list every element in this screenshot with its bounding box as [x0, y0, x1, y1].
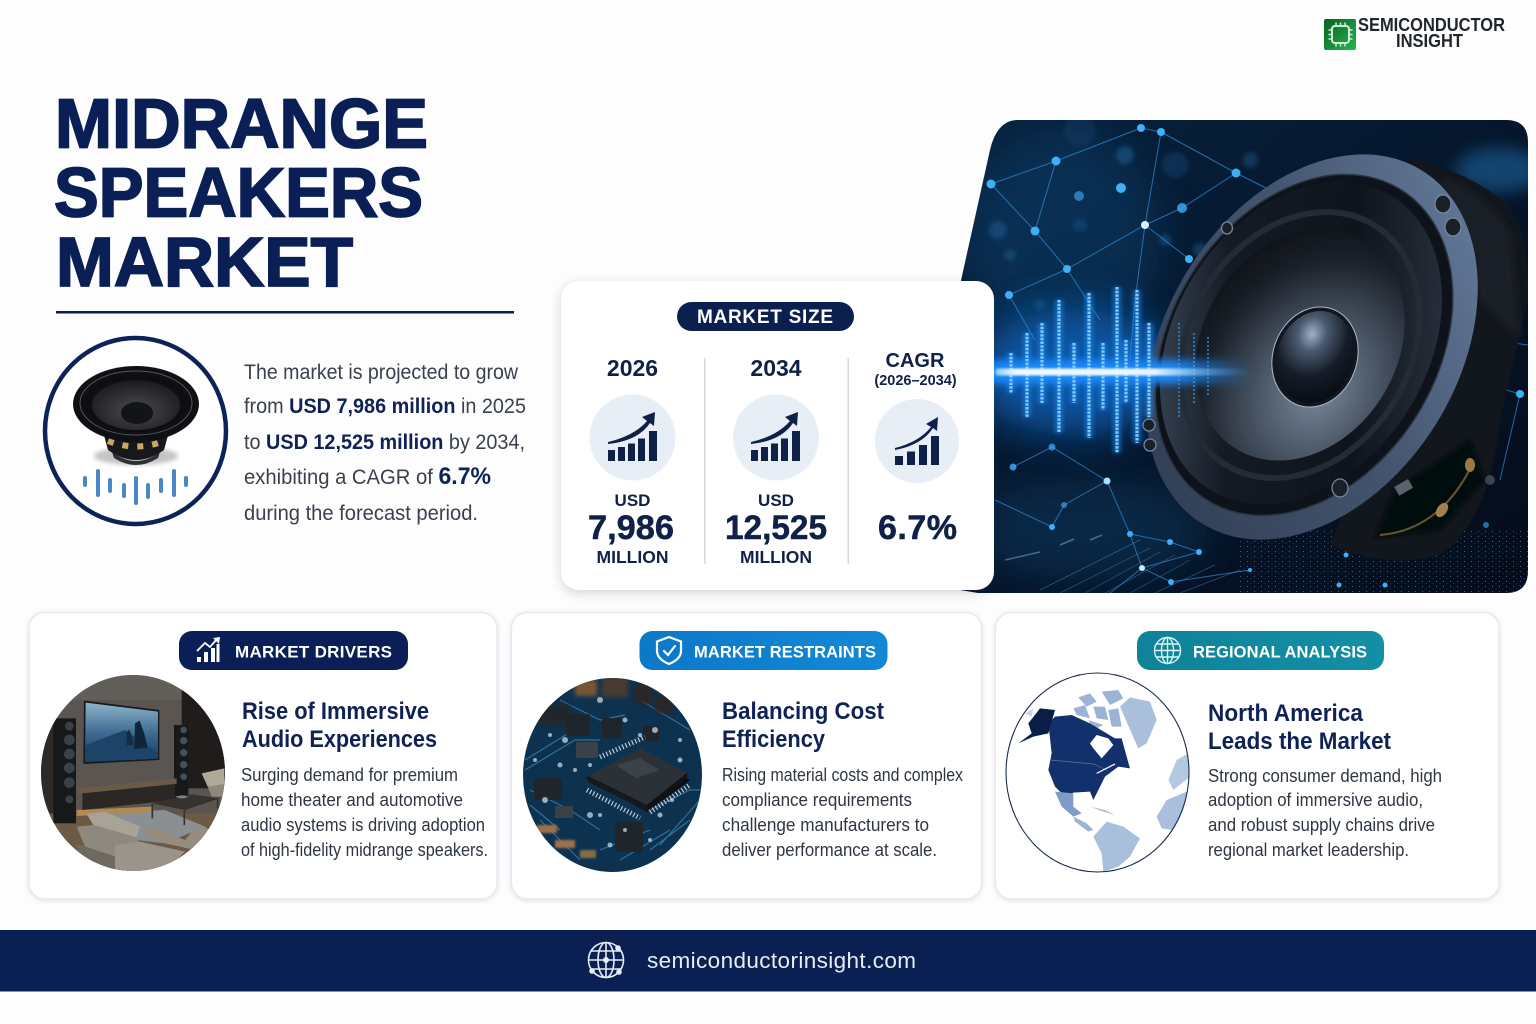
column: 2034: MILLION [740, 547, 812, 567]
title: MARKET [56, 223, 353, 301]
panel: market restraints [512, 612, 982, 899]
heading [1208, 700, 1391, 755]
column: 2026: 7,986 [588, 509, 674, 547]
column: CAGR: (2026–2034) [874, 373, 957, 389]
speaker front [1142, 154, 1478, 540]
heading: Efficiency [722, 726, 825, 753]
sound wave bars [85, 471, 186, 503]
armchair [202, 768, 224, 787]
logo: Semiconductor Insight [1324, 15, 1505, 51]
heading: Balancing Cost [722, 698, 884, 725]
description: deliver performance at scale. [722, 839, 937, 860]
map: globe with North America highlighted [1006, 673, 1190, 872]
description [722, 764, 964, 860]
icon: speaker in circle with sound wave [45, 338, 226, 524]
heading: Leads the Market [1208, 728, 1391, 755]
regional analysis badge: REGIONAL ANALYSIS [1193, 644, 1367, 662]
description [1208, 765, 1442, 860]
market drivers badge: MARKET DRIVERS [235, 642, 392, 662]
television [83, 701, 159, 764]
market restraints badge [640, 631, 888, 670]
icon: shield [657, 637, 681, 664]
title: MIDRANGE [55, 84, 428, 162]
heading [722, 698, 884, 753]
bokeh [989, 114, 1258, 311]
intro text block: to USD 12,525 million by 2034, [244, 430, 525, 454]
panel: market drivers [29, 612, 497, 899]
column: 2034: 2034 [750, 355, 802, 381]
description: adoption of immersive audio, [1208, 789, 1423, 810]
description: compliance requirements [722, 789, 912, 810]
network lines [991, 128, 1528, 593]
blurred top components [537, 677, 673, 725]
column: 2034 [725, 355, 827, 567]
column: CAGR: 6.7% [878, 509, 957, 547]
intro text block: exhibiting a CAGR of 6.7% [244, 463, 491, 490]
column: 2034: 12,525 [725, 509, 827, 547]
column: 2026: MILLION [597, 547, 668, 567]
ground grid and stars [1005, 530, 1528, 593]
speaker basket [1330, 158, 1528, 561]
regional analysis badge [1137, 631, 1384, 670]
panel: regional analysis [996, 612, 1499, 899]
title: SPEAKERS [54, 154, 423, 232]
description: audio systems is driving adoption [241, 814, 485, 835]
heading: Audio Experiences [242, 726, 437, 753]
logo: Semiconductor Insight: SEMICONDUCTOR [1358, 15, 1505, 35]
photo: home theater room [38, 670, 228, 877]
heading: North America [1208, 700, 1363, 727]
market size badge: MARKET SIZE [697, 307, 833, 328]
description: Rising material costs and complex [722, 764, 964, 785]
column: CAGR [874, 350, 959, 547]
footer bar [0, 930, 1536, 992]
description: and robust supply chains drive [1208, 814, 1435, 835]
panel: market size [561, 281, 994, 590]
intro text block: from USD 7,986 million in 2025 [244, 394, 526, 418]
logo: Semiconductor Insight: INSIGHT [1396, 31, 1463, 51]
market size badge [677, 302, 854, 331]
media console [78, 778, 177, 794]
column: CAGR: CAGR [886, 350, 945, 372]
description: Strong consumer demand, high [1208, 765, 1442, 786]
coffee table [152, 794, 220, 810]
network nodes [986, 124, 1524, 588]
column: 2026 [588, 355, 676, 567]
description: Surging demand for premium [241, 764, 458, 785]
icon: growth chart [197, 637, 220, 662]
icon: footer globe [588, 942, 624, 978]
intro text block: during the forecast period. [244, 501, 478, 525]
column: 2026: USD [615, 491, 650, 510]
title [54, 84, 428, 301]
column: 2026: 2026 [607, 355, 658, 381]
intro text block: The market is projected to grow [244, 360, 518, 384]
column: 2034: USD [758, 491, 794, 510]
sectional sofa [75, 812, 208, 871]
description [241, 764, 488, 860]
footer bar: semiconductorinsight.com [647, 948, 916, 973]
description: regional market leadership. [1208, 839, 1409, 860]
icon: globe [1154, 638, 1180, 664]
description: of high-fidelity midrange speakers. [241, 839, 488, 860]
description: challenge manufacturers to [722, 814, 929, 835]
main chip [586, 737, 690, 818]
floorstanding speakers [53, 718, 188, 823]
hero image: speaker with digital network [955, 93, 1536, 601]
sound wave [985, 287, 1253, 453]
heading [242, 698, 437, 753]
market drivers badge [179, 631, 408, 670]
photo: circuit board [520, 675, 705, 875]
market restraints badge: MARKET RESTRAINTS [694, 644, 876, 662]
description: home theater and automotive [241, 789, 463, 810]
heading: Rise of Immersive [242, 698, 429, 725]
intro text block [244, 360, 526, 525]
